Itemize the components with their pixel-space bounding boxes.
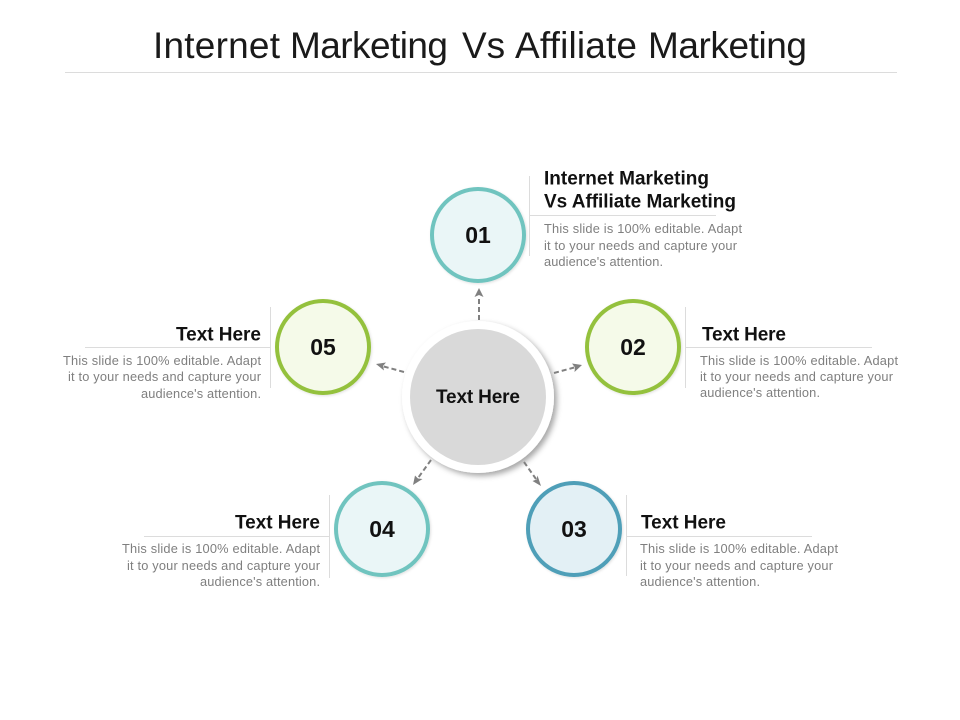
body 04: audience's attention. (200, 574, 320, 589)
body 02: This slide is 100% editable. Adapt (700, 353, 898, 368)
circle 01 (432, 189, 524, 281)
body 02: it to your needs and capture your (700, 369, 894, 384)
body 04: it to your needs and capture your (127, 558, 321, 573)
circle 04: 04 (369, 516, 395, 542)
heading 01: Internet Marketing (544, 168, 709, 190)
body 03: it to your needs and capture your (640, 558, 834, 573)
body 02: audience's attention. (700, 385, 820, 400)
title: Marketing (290, 25, 448, 66)
body 05: This slide is 100% editable. Adapt (63, 353, 261, 368)
arrow: to 02 (554, 364, 582, 373)
body 05: audience's attention. (141, 386, 261, 401)
central circle (402, 321, 554, 473)
title: Marketing (648, 25, 807, 66)
body 01: audience's attention. (544, 254, 663, 269)
central circle: Text Here (436, 387, 520, 408)
heading 01: Vs Affiliate Marketing (544, 192, 736, 212)
circle 05: 05 (310, 334, 336, 360)
item 04 (122, 483, 428, 589)
item 02 (587, 301, 898, 400)
arrow: to 01 (474, 288, 484, 320)
body 05 (63, 353, 262, 401)
body 03: This slide is 100% editable. Adapt (640, 541, 838, 556)
body 05: it to your needs and capture your (68, 369, 262, 384)
body 01 (544, 221, 742, 269)
heading 02: Text Here (702, 324, 786, 346)
circle 03: 03 (561, 516, 587, 542)
circle 05 (277, 301, 369, 393)
body 03: audience's attention. (640, 574, 760, 589)
item 05 (63, 301, 369, 401)
body 02 (700, 353, 898, 400)
body 04 (122, 541, 321, 589)
arrow: to 05 (376, 362, 404, 372)
title: Internet (153, 25, 281, 66)
heading 03: Text Here (641, 512, 726, 534)
item 01 (432, 168, 742, 281)
body 03 (640, 541, 838, 589)
heading 04: Text Here (235, 512, 320, 534)
circle 04 (336, 483, 428, 575)
title: Affiliate (515, 25, 637, 66)
arrow: to 04 (413, 460, 431, 485)
arrow: to 03 (524, 462, 541, 486)
circle 01: 01 (465, 222, 491, 248)
circle 02 (587, 301, 679, 393)
heading 01 (544, 168, 736, 212)
body 01: it to your needs and capture your (544, 238, 738, 253)
title (153, 25, 807, 66)
body 04: This slide is 100% editable. Adapt (122, 541, 320, 556)
body 01: This slide is 100% editable. Adapt (544, 221, 742, 236)
circle 02: 02 (620, 334, 646, 360)
title: Vs (462, 25, 505, 66)
item 03 (528, 483, 838, 589)
heading 05: Text Here (176, 324, 261, 346)
circle 03 (528, 483, 620, 575)
